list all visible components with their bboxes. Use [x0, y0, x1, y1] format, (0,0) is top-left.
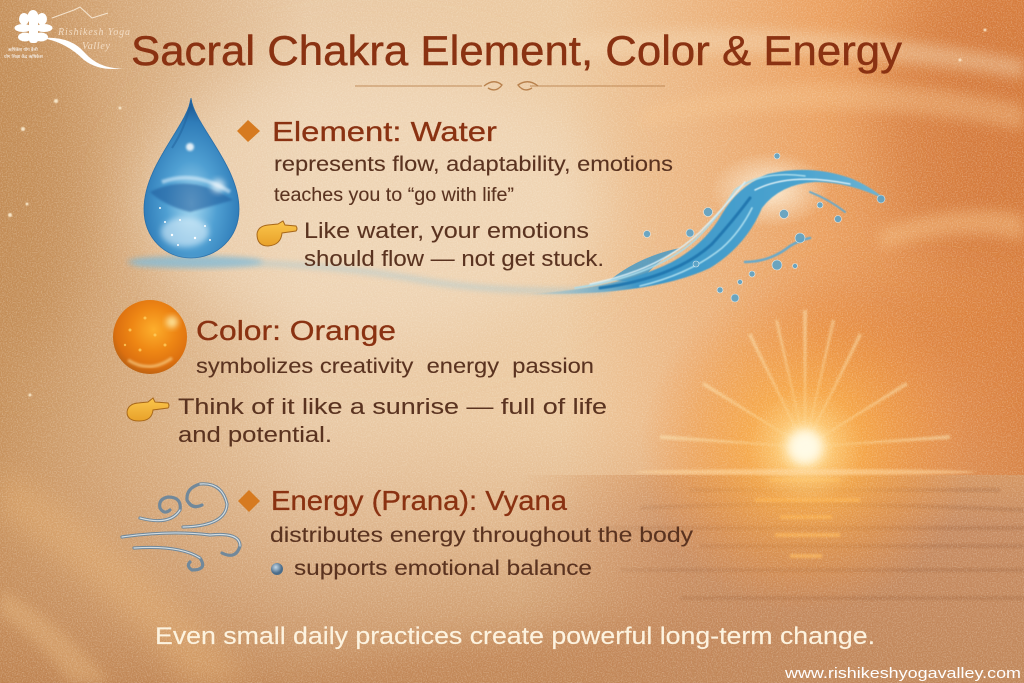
logo: Rishikesh Yoga Valley: Valley	[82, 41, 111, 52]
description: symbolizes creativity energy passion	[196, 355, 594, 378]
bullet dot	[271, 563, 283, 575]
logo: Rishikesh Yoga Valley: योग शिक्षा केंद्र ऋषिकेश	[4, 53, 44, 59]
bullet diamond	[237, 120, 260, 142]
footer tagline: Even small daily practices create powerful long-term change.	[155, 623, 875, 650]
icon: pointing hand	[257, 221, 297, 246]
logo: Rishikesh Yoga Valley	[4, 7, 130, 69]
background: sparkles	[8, 28, 986, 396]
note	[304, 218, 604, 271]
logo: Rishikesh Yoga Valley: ऋषिकेश योग वैली	[8, 46, 38, 52]
note: Like water, your emotions	[304, 218, 589, 243]
logo: Rishikesh Yoga Valley: Rishikesh Yoga	[57, 27, 130, 38]
water stream	[135, 262, 610, 291]
heading: Element: Water	[272, 116, 497, 147]
note: Think of it like a sunrise — full of life	[178, 394, 607, 419]
note	[178, 394, 607, 447]
section: energy vyana	[122, 484, 694, 580]
background: glow behind the wave	[710, 152, 830, 228]
icon: wind swirls	[122, 484, 240, 570]
website url: www.rishikeshyogavalley.com	[784, 665, 1021, 682]
icon: water drop	[127, 98, 263, 268]
description	[274, 153, 673, 206]
icon: orange sphere	[113, 300, 187, 374]
section: color orange	[113, 300, 607, 447]
note: and potential.	[178, 422, 332, 447]
description: distributes energy throughout the body	[270, 524, 694, 547]
description: represents flow, adaptability, emotions	[274, 153, 673, 176]
icon: white lotus	[14, 10, 52, 43]
note: should flow — not get stuck.	[304, 246, 604, 271]
title ornament	[355, 82, 665, 90]
splash wave	[530, 153, 886, 302]
title: Sacral Chakra Element, Color & Energy	[131, 27, 902, 74]
background: sun and rays	[635, 282, 975, 612]
icon: pointing hand	[127, 398, 169, 421]
background: sea at horizon	[520, 475, 1024, 683]
section: element water	[237, 116, 673, 271]
heading: Energy (Prana): Vyana	[271, 485, 567, 516]
bullet diamond	[238, 490, 260, 512]
heading: Color: Orange	[196, 315, 396, 346]
description: teaches you to “go with life”	[274, 185, 514, 206]
bullet text: supports emotional balance	[294, 557, 592, 580]
